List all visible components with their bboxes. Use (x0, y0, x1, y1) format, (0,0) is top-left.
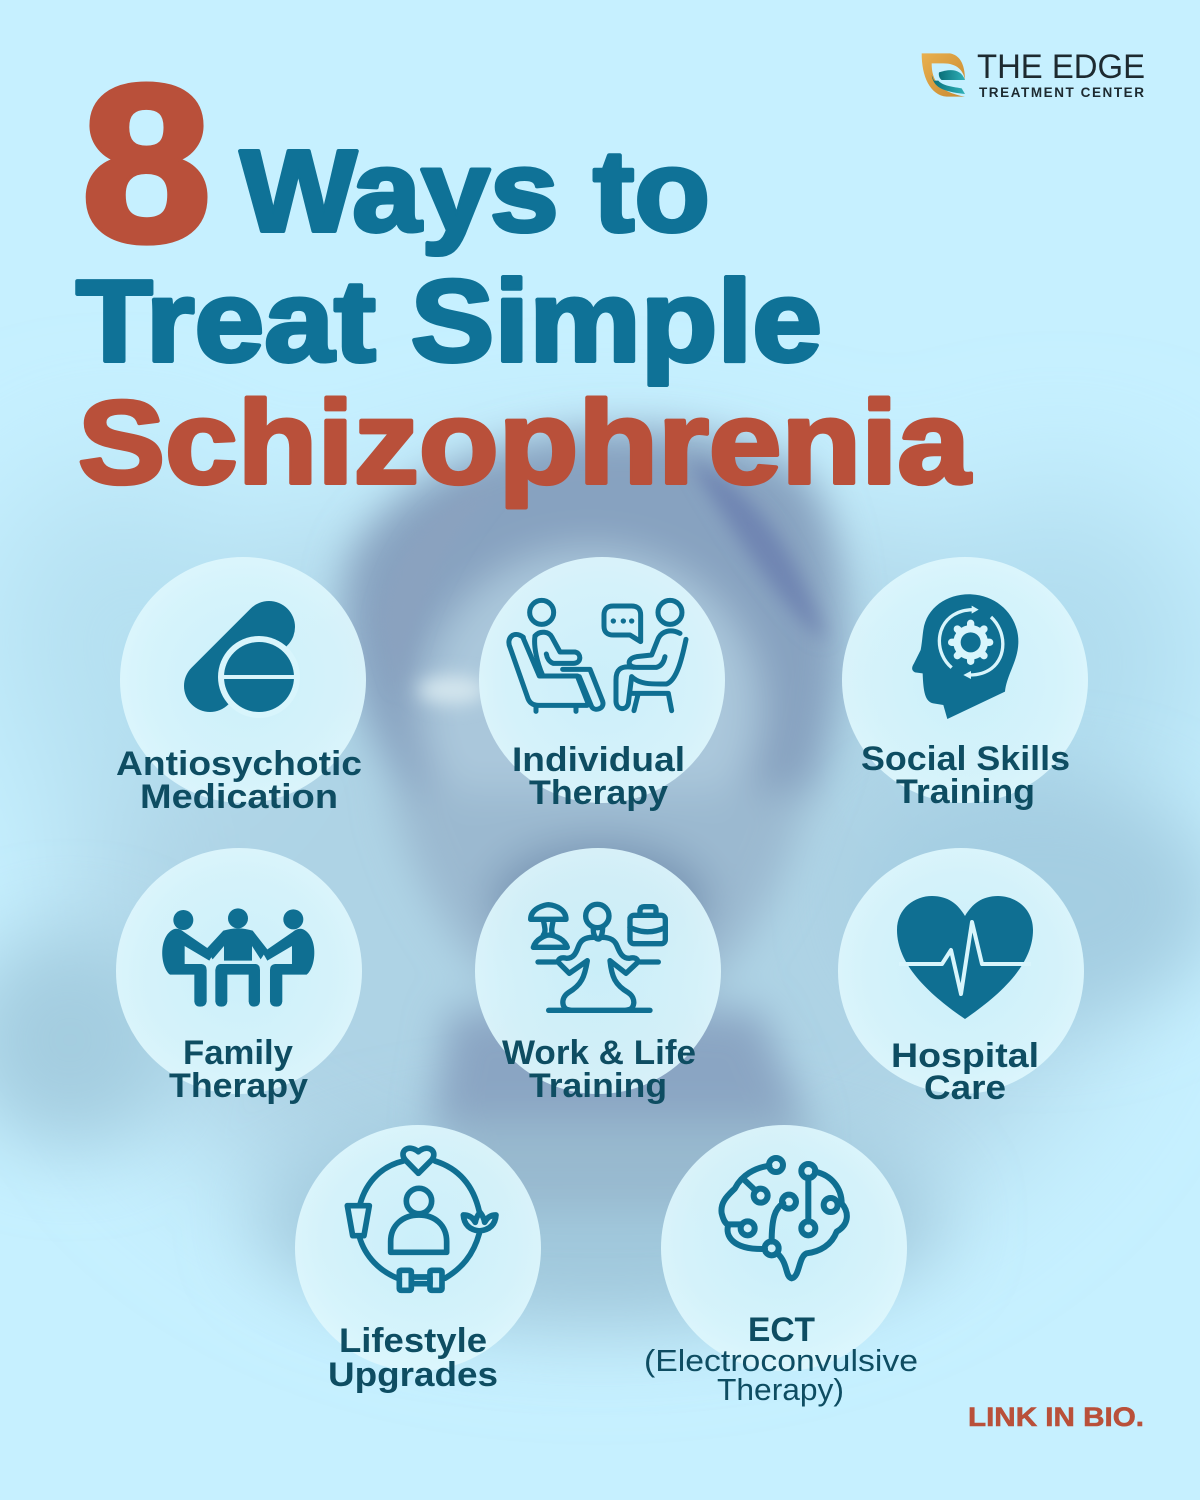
icon: brain circuit (721, 1158, 847, 1278)
logo (922, 48, 1145, 100)
icon: head with gear (912, 594, 1018, 719)
label (644, 1311, 918, 1407)
panel: individual therapy (479, 557, 725, 812)
label (328, 1322, 498, 1394)
icon: two people talking (509, 600, 686, 711)
label (502, 1034, 696, 1105)
label: Therapy (529, 774, 668, 812)
icon: meditating figure balancing (531, 904, 665, 1010)
icon: person in circle of lifestyle symbols (347, 1148, 496, 1290)
icon: three people at table (162, 908, 314, 1007)
label: Work & Life (502, 1034, 696, 1072)
label (861, 740, 1070, 811)
label: Lifestyle (339, 1322, 487, 1360)
heading line: Treat Simple: Treat Simple (76, 256, 822, 386)
panel: hospital care (838, 848, 1084, 1107)
label: Family (183, 1034, 293, 1072)
call to action: link in bio: LINK IN BIO. (968, 1402, 1144, 1432)
icon: heart with pulse (897, 896, 1033, 1019)
label (169, 1034, 308, 1105)
panel: social skills training (842, 557, 1088, 811)
title (76, 40, 972, 509)
label: Training (896, 773, 1035, 811)
panel: lifestyle upgrades (295, 1125, 541, 1394)
logo tagline: TREATMENT CENTER (979, 85, 1144, 100)
label (891, 1037, 1039, 1107)
logo wordmark: THE EDGE (977, 48, 1145, 86)
icon: pills (210, 627, 300, 718)
heading line: Schizophrenia: Schizophrenia (78, 377, 972, 509)
label: Individual (512, 741, 685, 779)
label: Therapy (169, 1067, 308, 1105)
label: Care (924, 1069, 1006, 1107)
label: ECT (748, 1311, 815, 1349)
panel: family therapy (116, 848, 362, 1105)
panel: work and life training (475, 848, 721, 1105)
label: Upgrades (328, 1356, 498, 1394)
label: Antiosychotic (116, 745, 362, 783)
label: Hospital (891, 1037, 1039, 1075)
label: Medication (140, 778, 338, 816)
heading line: Ways to: Ways to (240, 126, 710, 256)
label: Social Skills (861, 740, 1070, 778)
panel: ECT (644, 1125, 918, 1407)
logo mark (922, 53, 965, 97)
numeral 8: 8 (82, 40, 211, 288)
label: Therapy) (717, 1372, 844, 1407)
label (512, 741, 685, 812)
label: Training (529, 1067, 667, 1105)
label (116, 745, 362, 816)
panel: antipsychotic medication (116, 557, 366, 816)
label: (Electroconvulsive (644, 1343, 918, 1378)
